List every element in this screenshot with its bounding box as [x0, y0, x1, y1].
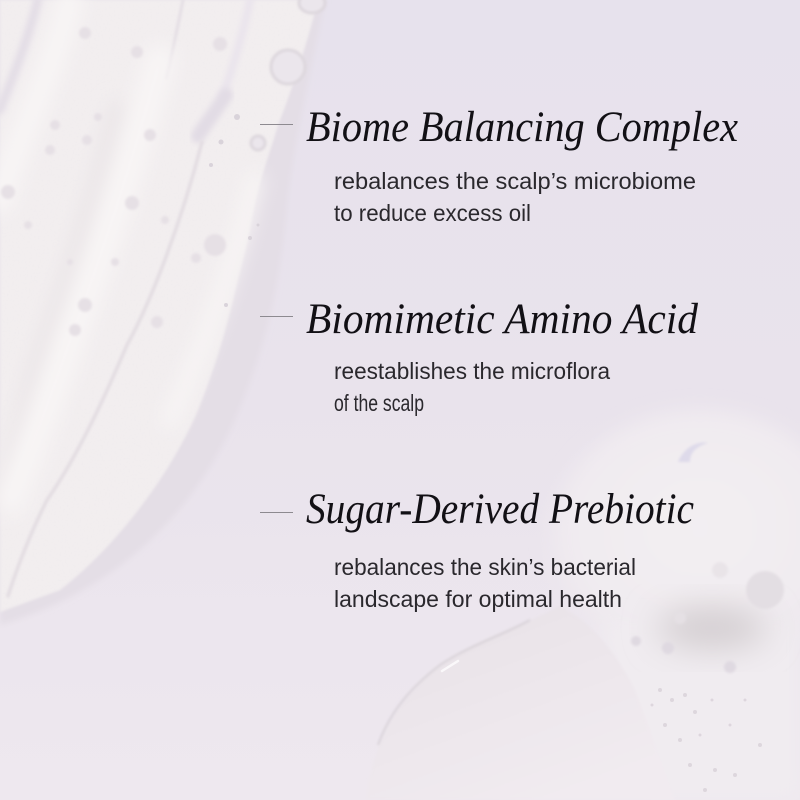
foam mound bottom right	[550, 410, 800, 800]
speckles	[650, 688, 762, 792]
foam grooves	[0, 0, 250, 596]
bright foam ridges	[0, 0, 255, 500]
foam bubbles	[1, 27, 227, 336]
gel droplets	[209, 114, 260, 307]
leader line 3	[260, 512, 293, 513]
leader line 1	[260, 124, 293, 125]
foam bubbles	[631, 443, 784, 673]
description 2: of the scalp	[334, 390, 424, 416]
description 1	[334, 168, 696, 226]
foam texture	[0, 0, 318, 612]
description 3: rebalances the skin’s bacterial	[334, 554, 636, 580]
description 3: landscape for optimal health	[334, 586, 622, 612]
description 1: rebalances the scalp’s microbiome	[334, 168, 696, 194]
large bubbles at swatch edge	[251, 0, 325, 150]
gel highlight	[442, 661, 458, 671]
gel rim	[378, 620, 530, 745]
description 2: reestablishes the microflora	[334, 358, 610, 384]
grey shadow in foam	[657, 608, 767, 648]
clear gel blob bottom	[366, 606, 675, 800]
clear gel smear on the left	[0, 0, 325, 625]
foam swatch on the left	[0, 0, 318, 612]
heading 3: Sugar-Derived Prebiotic	[306, 486, 694, 533]
heading 2: Biomimetic Amino Acid	[306, 296, 698, 343]
description 1: to reduce excess oil	[334, 200, 531, 226]
heading 1: Biome Balancing Complex	[306, 104, 738, 151]
leader line 2	[260, 316, 293, 317]
description 3	[334, 554, 636, 612]
description 2	[334, 358, 610, 416]
